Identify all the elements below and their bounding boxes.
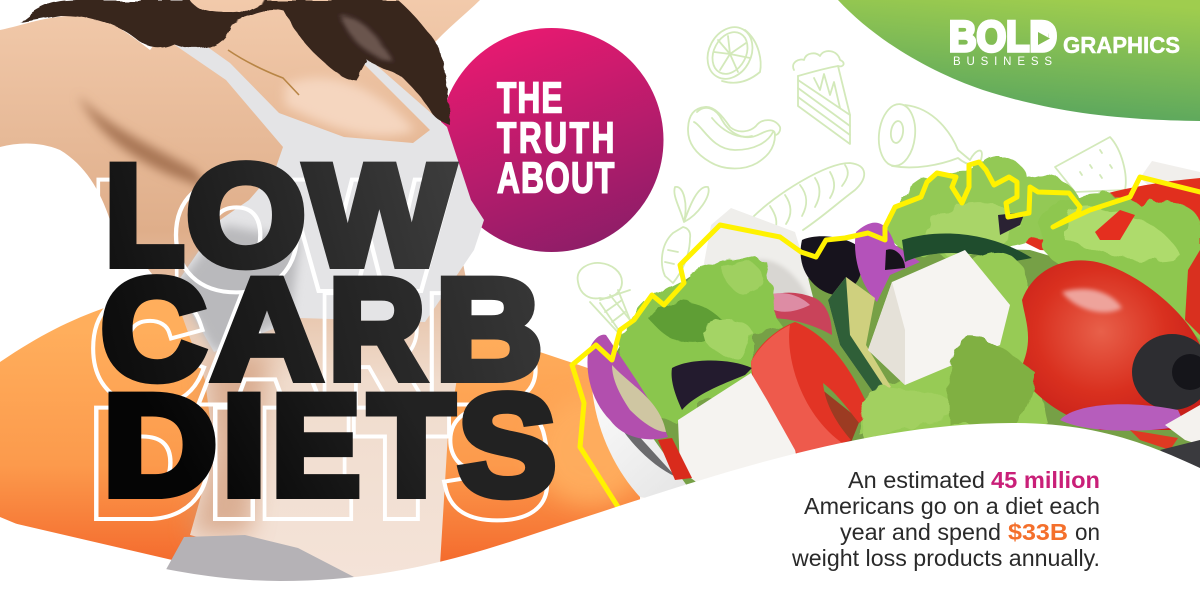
icon: lemon — [699, 19, 761, 87]
tomato — [1020, 260, 1200, 430]
cucumber slice — [828, 277, 891, 395]
onion lower right — [1060, 404, 1185, 431]
icon: carrot — [662, 187, 709, 283]
text block: statistic: weight loss products annually. — [791, 545, 1100, 571]
heading: the truth about: ABOUT — [497, 153, 614, 203]
left onion — [587, 335, 668, 439]
olive lower — [672, 360, 752, 410]
title: low carb diets: W — [306, 136, 453, 296]
front lettuce right — [949, 338, 1035, 425]
red pepper bottom right — [1130, 430, 1178, 450]
top lower shade — [172, 225, 300, 352]
title: low carb diets: O — [186, 136, 306, 296]
salad — [587, 156, 1200, 490]
gray sports top — [172, 38, 484, 352]
cucumber dark — [902, 234, 1032, 262]
red pepper big — [751, 322, 871, 458]
olive bottom right — [1160, 440, 1200, 480]
hair — [20, 0, 450, 125]
red onion top — [855, 223, 920, 302]
salad base — [612, 245, 1200, 490]
back feta right — [1140, 161, 1200, 200]
title: low carb diets: T — [369, 366, 454, 526]
onion and tomato mid — [752, 293, 832, 335]
food line icons — [578, 19, 1126, 340]
olive top right — [998, 212, 1025, 235]
necklace — [228, 50, 299, 95]
icon: cake slice — [793, 51, 850, 144]
pepper notch filling — [810, 380, 860, 455]
white wave — [0, 423, 1200, 600]
icon: ham — [876, 102, 982, 168]
chest highlight — [285, 78, 415, 136]
logo: bold business graphics: GRAPHICS — [1063, 32, 1180, 58]
front lettuce — [860, 389, 953, 440]
waist side shade — [190, 350, 270, 535]
title outline layer — [91, 178, 550, 522]
title: low carb diets: C — [101, 250, 206, 410]
woman photo — [0, 0, 484, 600]
title: low carb diets: L — [105, 136, 184, 296]
salad bowl — [592, 357, 760, 505]
lettuce under cheese — [860, 253, 1050, 435]
pink circle — [440, 28, 664, 252]
text block: statistic: 45 million — [991, 467, 1100, 493]
pants — [163, 535, 354, 600]
red pepper back — [1010, 178, 1200, 260]
heading: the truth about — [497, 73, 614, 203]
red pepper right — [1185, 250, 1200, 335]
green corner shape — [838, 0, 1200, 121]
title: low carb diets: D — [103, 366, 217, 526]
left lettuce — [618, 256, 783, 425]
logo: bold business graphics — [949, 13, 1180, 68]
red pepper spots — [1095, 210, 1135, 240]
icon: watermelon — [1055, 137, 1126, 192]
title: low carb diets: R — [329, 250, 425, 410]
feta small right — [1165, 405, 1200, 445]
logo: bold business graphics: BUSINESS — [953, 56, 1052, 68]
title: low carb diets: S — [458, 366, 556, 526]
title: low carb diets — [101, 136, 556, 526]
armpit shadow — [78, 95, 210, 190]
title: low carb diets: A — [212, 250, 322, 410]
skin: arm, chest and waist — [0, 0, 480, 578]
olive right — [1132, 334, 1200, 410]
text block: statistic — [791, 467, 1100, 571]
heading: the truth about: THE — [497, 73, 563, 123]
logo: bold business graphics: BOLD — [949, 13, 1057, 61]
text block: statistic: An estimated — [848, 467, 985, 493]
orange swoosh — [0, 291, 645, 585]
heading: the truth about: TRUTH — [497, 113, 614, 163]
text block: statistic: Americans go on a diet each — [804, 493, 1100, 519]
title: low carb diets: B — [436, 250, 543, 410]
icon: hot dog — [688, 107, 780, 168]
title: low carb diets: I — [222, 366, 266, 526]
bottom pepper left — [658, 438, 692, 480]
yellow line — [572, 162, 1200, 507]
title: low carb diets: E — [272, 366, 360, 526]
back lettuce — [885, 156, 1200, 340]
back feta cube — [700, 208, 815, 305]
text block: statistic: on — [1075, 519, 1100, 545]
text block: statistic: $33B — [1008, 519, 1068, 545]
central feta cube — [868, 250, 1010, 385]
olive top — [801, 236, 862, 295]
feta lower — [678, 373, 800, 490]
icon: baguette — [753, 163, 864, 230]
text block: statistic: year and spend — [840, 519, 1001, 545]
icon: ice cream — [578, 263, 634, 340]
